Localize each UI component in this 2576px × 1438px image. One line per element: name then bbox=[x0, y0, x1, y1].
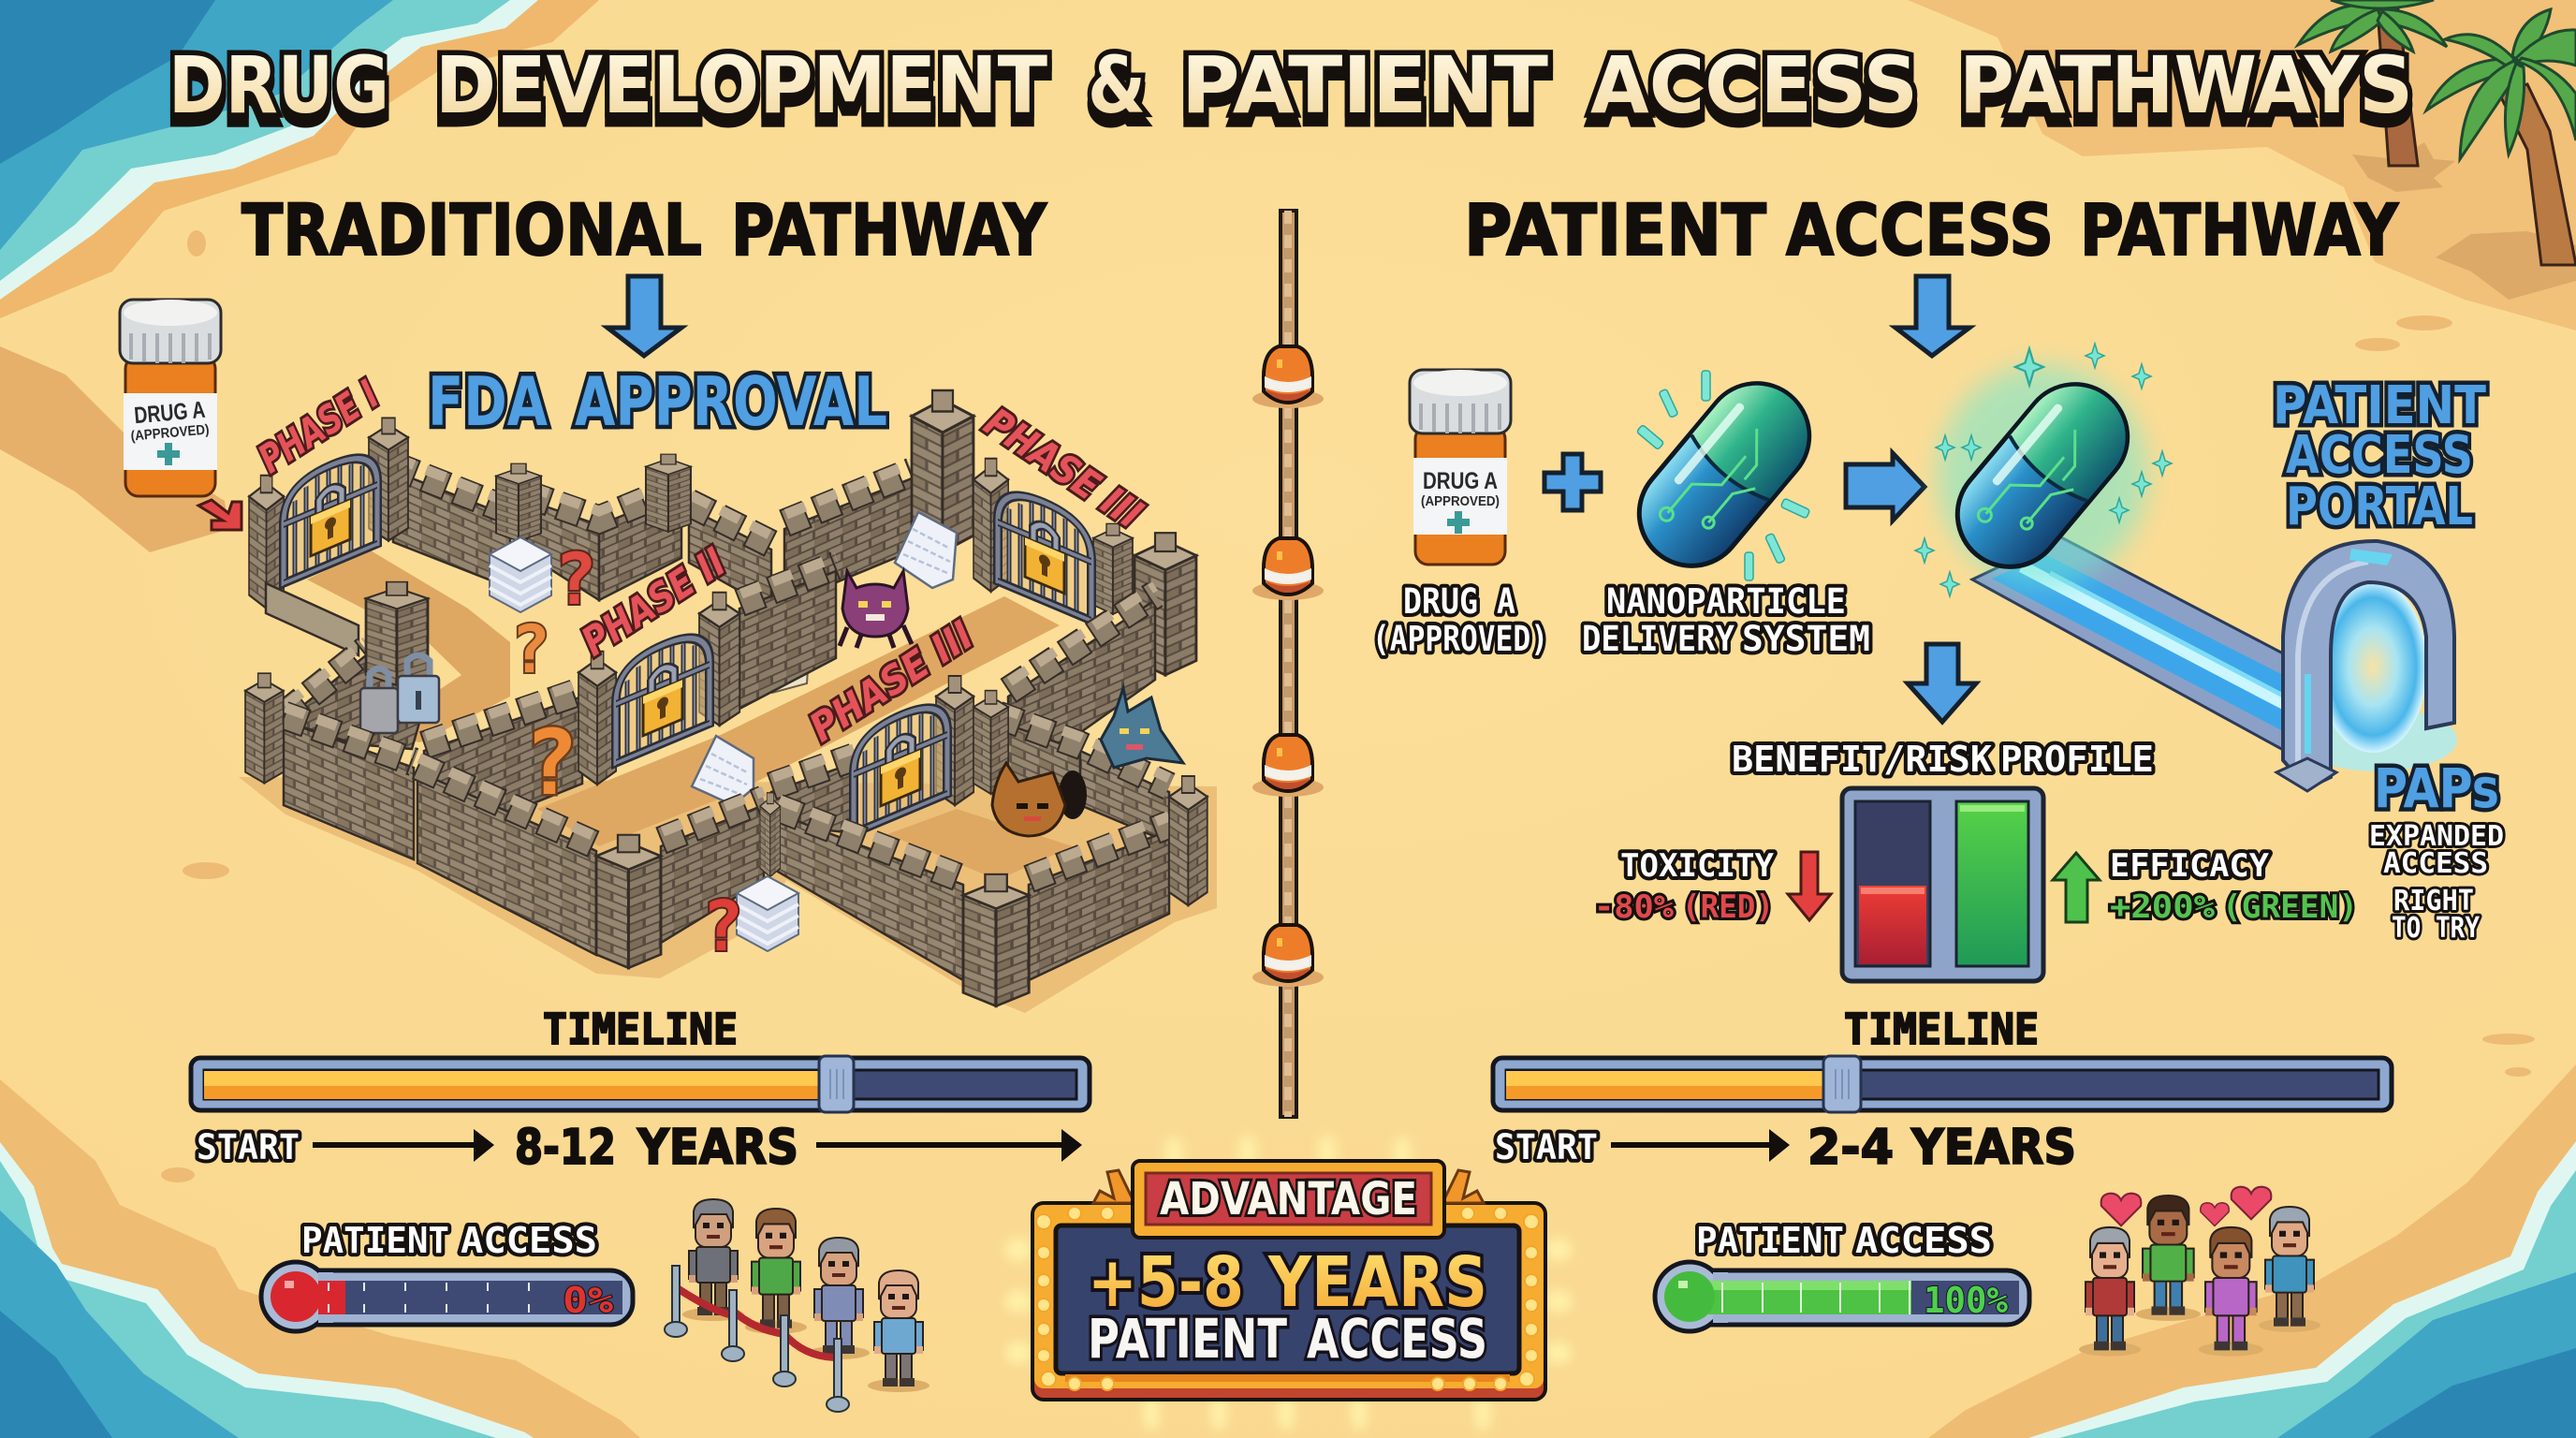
divider: rope with buoys bbox=[1252, 211, 1324, 1117]
plaque bbox=[1133, 1161, 1444, 1238]
timeline bar: traditional bbox=[191, 1056, 1090, 1112]
background: sand specks bbox=[161, 230, 2535, 1182]
heading: traditional pathway: TRADITIONAL bbox=[242, 188, 702, 271]
arrow: toxicity down bbox=[1788, 852, 1831, 920]
middle wall with gate bbox=[284, 557, 1169, 847]
particles around capsule bbox=[1636, 371, 1810, 580]
plaque text: ADVANTAGE bbox=[1160, 1173, 1417, 1225]
heart small bbox=[2201, 1203, 2229, 1226]
arrow: start to years bbox=[1611, 1129, 1790, 1162]
label: nanoparticle delivery system: NANOPARTICLE bbox=[1606, 581, 1846, 622]
title: PATHWAYS bbox=[1959, 39, 2413, 131]
panel: traditional pathway bbox=[120, 188, 1217, 1412]
arrow: red entry bbox=[198, 500, 242, 530]
heading: patient access pathway: ACCESS bbox=[1786, 188, 2054, 271]
stat: +5-8 years bbox=[1088, 1242, 1487, 1323]
arrow: down to benefit risk bbox=[1908, 644, 1976, 722]
label: phase III lower: PHASE III bbox=[801, 612, 981, 751]
stat: +5-8 years: YEARS bbox=[1267, 1242, 1487, 1323]
label: phase II: PHASE II bbox=[574, 538, 734, 665]
title: ACCESS bbox=[1590, 39, 1918, 131]
title: DEVELOPMENT bbox=[435, 39, 1047, 131]
queue posts bbox=[665, 1266, 849, 1412]
patient: waiting man green bbox=[745, 1209, 807, 1334]
patient: happy man red bbox=[2079, 1227, 2141, 1357]
label: expanded access bbox=[2369, 820, 2504, 880]
stat: +5-8 years: +5-8 bbox=[1088, 1242, 1244, 1323]
label: toxicity: -80% bbox=[1594, 888, 1675, 926]
label: expanded access: ACCESS bbox=[2383, 847, 2488, 880]
label: efficacy: EFFICACY bbox=[2110, 847, 2270, 885]
heading: patient access portal: ACCESS bbox=[2286, 425, 2473, 486]
background: sand trail bbox=[0, 346, 229, 552]
icon: drug bottle bbox=[120, 300, 221, 496]
buoy 3 bbox=[1252, 735, 1324, 797]
label: right to try bbox=[2392, 885, 2480, 945]
title: & bbox=[1088, 39, 1146, 131]
question mark: ? bbox=[554, 537, 597, 621]
marquee wings bbox=[1093, 1170, 1484, 1203]
icon: patient access portal bbox=[2276, 541, 2457, 791]
stat label: patient access bbox=[1088, 1307, 1487, 1371]
start label: START bbox=[1495, 1127, 1598, 1167]
label: toxicity: TOXICITY bbox=[1620, 847, 1775, 885]
bar: efficacy bbox=[1956, 801, 2028, 966]
background: top-right darker dune bbox=[1908, 0, 2576, 330]
arrow: right to glowing capsule bbox=[1846, 453, 1925, 521]
marquee bulbs bbox=[1036, 1207, 1539, 1390]
castle ground shadow bbox=[239, 777, 1217, 1013]
icon: drug bottle: DRUG A bbox=[133, 397, 206, 429]
patient access label bbox=[301, 1220, 597, 1261]
icon: plus bbox=[1544, 454, 1601, 510]
patient access label: PATIENT bbox=[1696, 1220, 1844, 1261]
heart bbox=[2232, 1187, 2271, 1219]
heading: patient access pathway: PATIENT bbox=[1464, 188, 1766, 271]
timeline bar: patient access bbox=[1493, 1056, 2392, 1112]
monster: purple bbox=[840, 571, 912, 648]
patient: happy woman bbox=[2199, 1227, 2263, 1357]
label: efficacy bbox=[2110, 847, 2358, 926]
dirt paths bbox=[307, 550, 1073, 880]
icon: glowing capsule bbox=[1915, 344, 2172, 596]
patient: waiting man bbox=[682, 1199, 744, 1321]
label: toxicity: (RED) bbox=[1682, 888, 1774, 926]
bar: toxicity bbox=[1855, 801, 1930, 966]
label: efficacy: +200% bbox=[2110, 888, 2216, 926]
palm shadows bbox=[2352, 142, 2576, 300]
label: toxicity bbox=[1594, 847, 1775, 926]
gauge: patient access 0% bbox=[261, 1262, 633, 1331]
gauge: patient access 100%: 100% bbox=[1924, 1280, 2008, 1321]
heading: FDA approval: APPROVAL bbox=[575, 362, 887, 441]
sparkles bbox=[1915, 344, 2172, 596]
label: drug A approved: (APPROVED) bbox=[1372, 619, 1548, 659]
stat label: patient access: ACCESS bbox=[1307, 1307, 1487, 1371]
castle back walls bbox=[249, 390, 1196, 675]
monster: orange bbox=[992, 763, 1065, 836]
duration: 8-12 years bbox=[515, 1120, 798, 1176]
patient access label bbox=[1696, 1220, 1992, 1261]
queue ropes bbox=[676, 1287, 838, 1357]
grey padlocks bbox=[360, 655, 439, 733]
heading: patient access portal: PORTAL bbox=[2286, 477, 2473, 537]
label: right to try: RIGHT bbox=[2393, 885, 2474, 917]
question mark: ? bbox=[524, 711, 578, 815]
question mark: ? bbox=[702, 887, 743, 967]
arrow: efficacy up bbox=[2053, 853, 2100, 922]
arrow: start to years bbox=[313, 1129, 494, 1162]
title: PATIENT bbox=[1181, 39, 1548, 131]
stat label: patient access: PATIENT bbox=[1088, 1307, 1287, 1371]
panel: patient access pathway bbox=[1372, 188, 2504, 1357]
heading: patient access portal: PATIENT bbox=[2273, 375, 2486, 436]
label: nanoparticle delivery system bbox=[1582, 581, 1870, 659]
arrow: down from heading bbox=[1895, 276, 1969, 356]
heading: traditional pathway: PATHWAY bbox=[731, 188, 1047, 271]
label: right to try: TO TRY bbox=[2392, 912, 2480, 945]
label: phase III upper: PHASE III bbox=[976, 399, 1150, 537]
heart bbox=[2101, 1194, 2141, 1225]
buoy 2 bbox=[1252, 538, 1324, 600]
buoy 4 bbox=[1252, 925, 1324, 987]
heading: FDA approval bbox=[428, 362, 887, 441]
icon: drug bottle: DRUG A bbox=[1423, 468, 1498, 494]
heading: patient access portal bbox=[2273, 375, 2486, 537]
heading: traditional pathway bbox=[242, 188, 1047, 271]
water: top-left corner bbox=[0, 0, 599, 318]
low stone ledge bbox=[266, 583, 359, 655]
marquee frame bbox=[1032, 1203, 1545, 1400]
duration: 2-4 years: 2-4 bbox=[1808, 1120, 1894, 1176]
palm trees bbox=[2298, 0, 2576, 300]
label: efficacy: (GREEN) bbox=[2222, 888, 2358, 926]
gauge: patient access 0%: 0% bbox=[563, 1280, 613, 1321]
water: bottom-right corner bbox=[1928, 1064, 2576, 1438]
heading: benefit risk profile: BENEFIT/RISK bbox=[1732, 739, 1992, 780]
patient: waiting woman bbox=[808, 1238, 870, 1359]
small skull paper bbox=[758, 646, 809, 693]
icon: nanoparticle capsule bbox=[1617, 362, 1831, 587]
title: DRUG bbox=[168, 39, 389, 131]
castle front walls bbox=[245, 673, 1208, 1006]
chart: benefit risk bars bbox=[1842, 788, 2043, 981]
queue of waiting patients bbox=[665, 1199, 929, 1412]
gate: phase I bbox=[284, 446, 377, 583]
marquee glow lights bbox=[1005, 1135, 1572, 1431]
buoy 1 bbox=[1252, 346, 1324, 408]
tilted paper bbox=[692, 736, 754, 805]
duration: 2-4 years bbox=[1808, 1120, 2076, 1176]
label: drug A approved bbox=[1372, 581, 1548, 659]
castle maze bbox=[239, 372, 1217, 1013]
timeline label: TIMELINE bbox=[1844, 1005, 2039, 1054]
heading: patient access pathway: PATHWAY bbox=[2080, 188, 2399, 271]
gauge: patient access 100% bbox=[1655, 1262, 2029, 1331]
start label: START bbox=[197, 1127, 300, 1167]
label: drug A approved: DRUG A bbox=[1403, 581, 1515, 622]
duration: 8-12 years: 8-12 bbox=[515, 1120, 616, 1176]
heading: patient access pathway bbox=[1464, 188, 2399, 271]
question mark: ? bbox=[511, 611, 550, 688]
gate: phase II bbox=[616, 625, 710, 763]
icon: drug bottle: (APPROVED) bbox=[1421, 493, 1500, 509]
patient access label: ACCESS bbox=[461, 1220, 597, 1261]
label: nanoparticle delivery system: SYSTEM bbox=[1742, 619, 1870, 659]
label: phase I: PHASE I bbox=[250, 372, 387, 482]
patient: happy man blue bbox=[2259, 1207, 2320, 1332]
wall hole bbox=[1059, 770, 1087, 819]
icon: drug bottle bbox=[1410, 370, 1511, 565]
arrow: down to FDA approval bbox=[607, 276, 681, 356]
patient access label: PATIENT bbox=[301, 1220, 449, 1261]
beam to portal bbox=[1972, 537, 2285, 751]
icon: drug bottle: (APPROVED) bbox=[130, 421, 210, 445]
paper stack bbox=[490, 537, 551, 612]
heading: benefit risk profile bbox=[1732, 739, 2154, 780]
upright paper bbox=[895, 512, 957, 588]
monster: blue bbox=[1101, 688, 1183, 768]
arrow: years to end bbox=[816, 1129, 1082, 1162]
heading: PAPs: PAPs bbox=[2374, 756, 2499, 820]
callout: advantage marquee bbox=[1005, 1135, 1572, 1431]
gate: phase III upper bbox=[998, 483, 1091, 621]
water: bottom-left corner bbox=[0, 1079, 640, 1438]
heading: FDA approval: FDA bbox=[428, 362, 548, 441]
heading: benefit risk profile: PROFILE bbox=[2000, 739, 2154, 780]
title bbox=[168, 39, 2413, 131]
happy patients bbox=[2079, 1187, 2320, 1357]
palm: back tree bbox=[2298, 0, 2447, 166]
duration: 8-12 years: YEARS bbox=[637, 1120, 798, 1176]
paper stack bbox=[737, 876, 798, 951]
patient: bald man bbox=[868, 1270, 929, 1392]
palm: front tree bbox=[2426, 9, 2576, 265]
gate: phase III lower bbox=[854, 696, 947, 833]
patient access label: ACCESS bbox=[1855, 1220, 1992, 1261]
label: expanded access: EXPANDED bbox=[2369, 820, 2504, 853]
patient: happy man green bbox=[2136, 1196, 2201, 1321]
duration: 2-4 years: YEARS bbox=[1910, 1120, 2076, 1176]
label: nanoparticle delivery system: DELIVERY bbox=[1582, 619, 1735, 659]
timeline label: TIMELINE bbox=[543, 1005, 738, 1054]
